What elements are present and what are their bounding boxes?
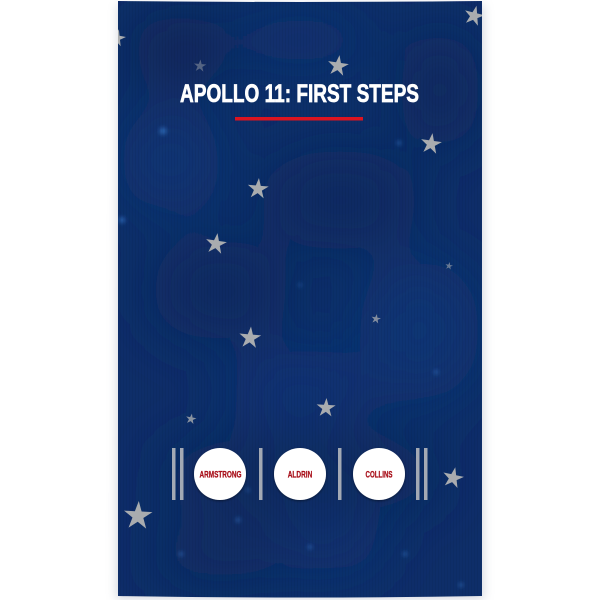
left double bars [172, 448, 184, 500]
circle: Collins [353, 448, 405, 500]
circle: Aldrin [274, 448, 326, 500]
circle: Armstrong: ARMSTRONG [200, 470, 242, 480]
stars [107, 3, 486, 529]
nebula blotches [120, 15, 480, 580]
right double bars [416, 448, 428, 500]
circle: Collins: COLLINS [366, 470, 392, 480]
title underline [235, 117, 363, 120]
title: APOLLO 11: FIRST STEPS [180, 80, 419, 108]
small blue glows [119, 128, 463, 587]
infographic [112, 1, 488, 600]
panel: navy starfield cloth [107, 0, 490, 600]
divider bar [259, 448, 262, 500]
fabric weave [110, 0, 490, 600]
circle: Armstrong [194, 448, 246, 500]
cloth shadow [116, 5, 484, 599]
circle: Aldrin: ALDRIN [288, 470, 312, 480]
divider bar [338, 448, 342, 500]
crew row [172, 448, 428, 500]
